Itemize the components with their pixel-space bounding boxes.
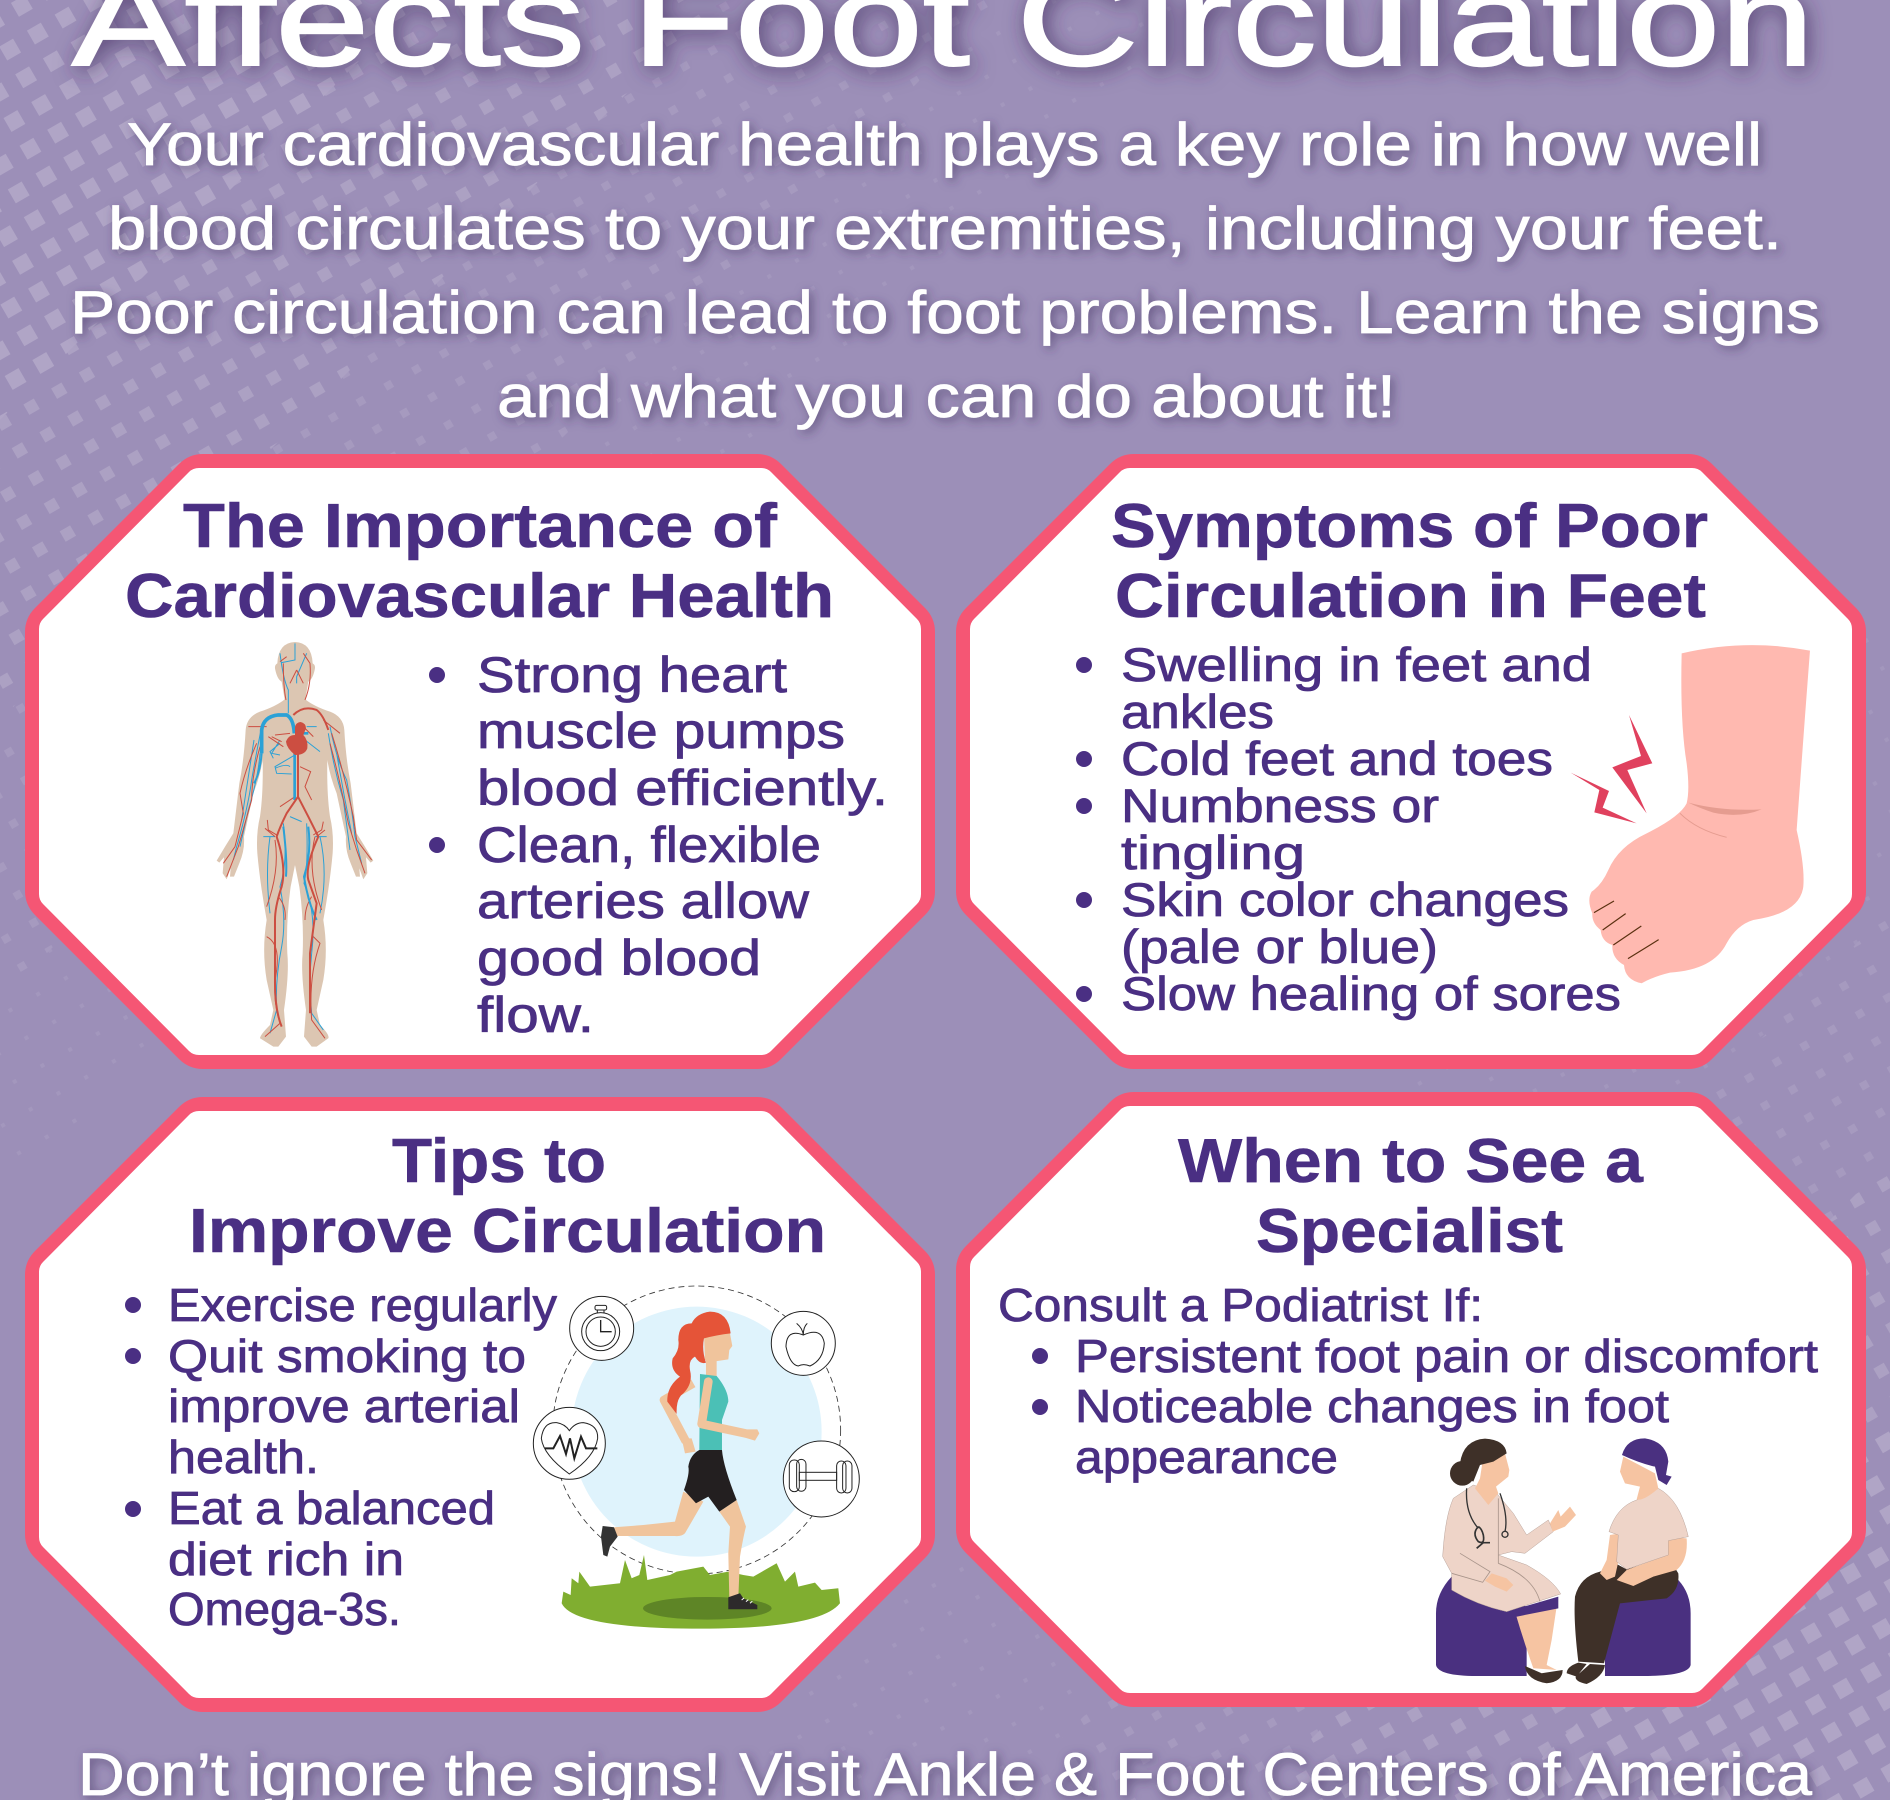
panel: symptoms of poor circulation [956,454,1866,1069]
bullet list: tips: diet rich in [168,1533,404,1585]
bullet list: importance: Clean, flexible [477,817,821,873]
bullet list: symptoms [1076,638,1621,1020]
bullet list: symptoms: Cold feet and toes [1121,732,1553,785]
bullet list: importance [429,647,888,1043]
icon: dumbbell [783,1441,859,1517]
panel: tips to improve circulation [25,1097,935,1712]
bullet list: importance: good blood [477,930,761,986]
intro text [70,111,1820,430]
text block: consult a podiatrist: Consult a Podiatrist If: [998,1279,1483,1331]
intro text: blood circulates to your extremities, including your feet. [108,195,1782,262]
bullet list: importance: blood efficiently. [477,760,888,816]
heading: importance [125,492,834,631]
icon: apple [771,1311,835,1375]
bullet list: symptoms: Numbness or [1121,779,1439,832]
panel: when to see a specialist [956,1092,1866,1707]
icon: stopwatch [570,1296,634,1360]
heading: symptoms: Circulation in Feet [1115,562,1706,631]
intro text: Your cardiovascular health plays a key role in how well [127,111,1762,178]
bullet list: tips [125,1279,557,1635]
bullet list: tips: health. [168,1431,319,1483]
icon: swollen foot [1571,645,1810,983]
intro text: and what you can do about it! [497,363,1396,430]
icon: human circulatory system [217,642,373,1047]
heading: tips: Improve Circulation [189,1197,826,1266]
figure: runner [601,1312,759,1609]
bullet list: symptoms: ankles [1121,685,1274,738]
panel: importance of cardiovascular health [25,454,935,1069]
icon: heart rate [533,1407,605,1479]
heading: importance: The Importance of [183,492,777,561]
bullet list: symptoms: (pale or blue) [1121,920,1438,973]
bullet list: tips: Exercise regularly [168,1279,557,1331]
heading: importance: Cardiovascular Health [125,562,834,631]
heading: specialist: Specialist [1256,1197,1563,1266]
heading: specialist: When to See a [1178,1127,1644,1196]
bullet list: importance: flow. [477,987,594,1043]
text block: consult a podiatrist: Noticeable changes in foot [1075,1380,1669,1432]
bullet list: tips: Quit smoking to [168,1330,526,1382]
bullet list: symptoms: tingling [1121,826,1305,879]
bullet list: tips: Eat a balanced [168,1482,495,1534]
bullet list: symptoms: Swelling in feet and [1121,638,1592,691]
bullet list: importance: Strong heart [477,647,787,703]
bullet list: importance: arteries allow [477,873,810,929]
heading: symptoms: Symptoms of Poor [1111,492,1708,561]
heading: specialist [1178,1127,1644,1266]
text block: consult a podiatrist [998,1279,1818,1483]
text block: consult a podiatrist: appearance [1075,1431,1338,1483]
bullet list: importance: muscle pumps [477,703,845,759]
heading: tips: Tips to [392,1127,606,1196]
text block: consult a podiatrist: Persistent foot pain or discomfort [1075,1330,1818,1382]
bullet list: tips: Omega-3s. [168,1583,401,1635]
illustration: doctor and patient [1436,1438,1691,1684]
heading: symptoms [1111,492,1708,631]
bullet list: symptoms: Skin color changes [1121,873,1569,926]
illustration: runner with health icons [533,1286,859,1629]
intro text: Poor circulation can lead to foot problems. Learn the signs [70,279,1820,346]
bullet list: symptoms: Slow healing of sores [1121,967,1621,1020]
bullet list: tips: improve arterial [168,1380,520,1432]
heading: tips [189,1127,826,1266]
